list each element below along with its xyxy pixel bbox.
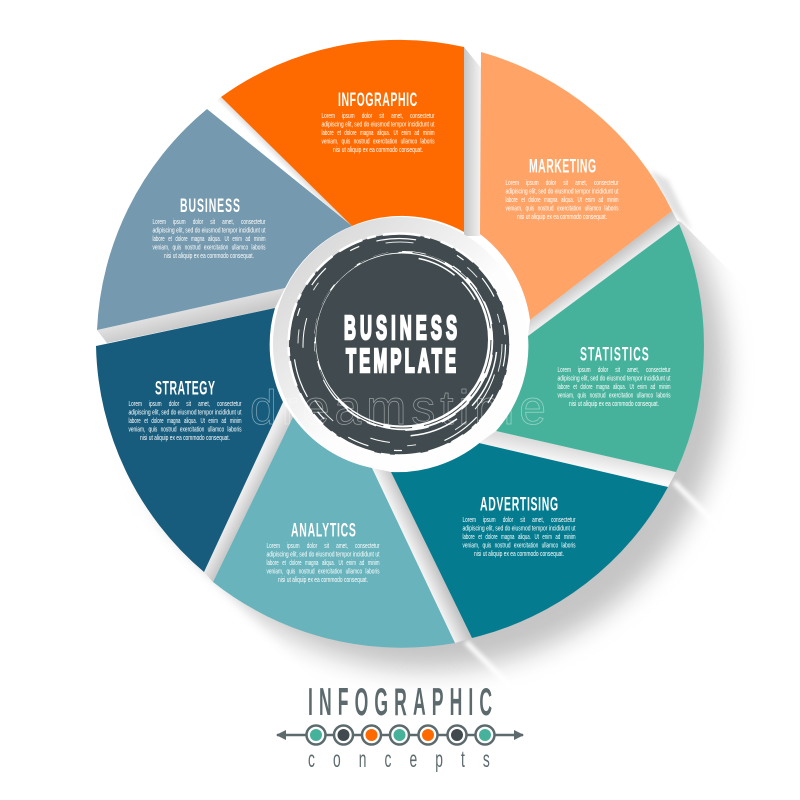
footer title: INFOGRAPHIC [308, 681, 492, 724]
text block: advertising: labore et dolore magna aliqua. Ut enim ad minim [462, 532, 576, 541]
text block: infographic: nisi ut aliquip ex ea commodo consequat. [333, 145, 423, 154]
center hub ring [273, 217, 527, 471]
footer subtitle: concepts [308, 748, 490, 773]
text block: analytics [266, 541, 380, 584]
text block: statistics: nisi ut aliquip ex ea commodo consequat. [569, 399, 659, 408]
text block: marketing: veniam, quis nostrud exercitation ullamco laboris [506, 204, 619, 212]
text block: business: adipiscing elit, sed do eiusmod tempor incididunt ut [152, 226, 266, 234]
heading: strategy: STRATEGY [155, 378, 215, 399]
text block: analytics: Lorem ipsum dolor sit amet, consectetur [266, 541, 380, 550]
panel: business [97, 109, 352, 330]
text block: infographic [322, 111, 435, 154]
shadow cut lower left [0, 400, 335, 800]
heading: marketing: MARKETING [529, 156, 596, 177]
panel: infographic [221, 40, 464, 232]
text block: marketing [506, 178, 619, 221]
drop shadow [130, 74, 726, 670]
text block: business: nisi ut aliquip ex ea commodo consequat. [164, 251, 254, 260]
text block: strategy: adipiscing elit, sed do eiusmod tempor incididunt ut [128, 408, 242, 416]
text block: analytics: veniam, quis nostrud exercitation ullamco laboris [266, 566, 380, 576]
panel: analytics [213, 417, 455, 648]
shadow streak right [674, 482, 745, 553]
text block: statistics: Lorem ipsum dolor sit amet, consectetur [558, 365, 671, 374]
text block: advertising: adipiscing elit, sed do eiusmod tempor incididunt ut [462, 524, 576, 532]
text block: business: Lorem ipsum dolor sit amet, consectetur [152, 217, 266, 226]
heading: infographic: INFOGRAPHIC [338, 90, 417, 111]
center badge [288, 234, 510, 456]
heading: analytics: ANALYTICS [291, 520, 356, 541]
text block: analytics: adipiscing elit, sed do eiusmod tempor incididunt ut [266, 550, 380, 558]
text block: infographic: labore et dolore magna aliqua. Ut enim ad minim [322, 128, 434, 137]
text block: business: labore et dolore magna aliqua. Ut enim ad minim [152, 234, 266, 243]
text block: marketing: adipiscing elit, sed do eiusmod tempor incididunt ut [506, 186, 618, 196]
heading: business: BUSINESS [180, 196, 240, 217]
text block: statistics [558, 365, 671, 408]
text block: infographic: veniam, quis nostrud exercitation ullamco laboris [322, 136, 435, 146]
text block: strategy: Lorem ipsum dolor sit amet, consectetur [128, 399, 242, 408]
text block: marketing: Lorem ipsum dolor sit amet, consectetur [506, 178, 619, 187]
panel: statistics [496, 224, 704, 472]
text block: strategy [128, 399, 242, 442]
text block: infographic: Lorem ipsum dolor sit amet, consectetur [322, 111, 435, 120]
text block: business: veniam, quis nostrud exercitation ullamco laboris [152, 242, 266, 252]
panel: marketing [480, 52, 672, 320]
text block: analytics: nisi ut aliquip ex ea commodo consequat. [278, 575, 368, 584]
text block: statistics: veniam, quis nostrud exercitation ullamco laboris [558, 390, 671, 400]
brush ring [309, 248, 497, 436]
gap shadows [97, 47, 679, 643]
text block: statistics: labore et dolore magna aliqua. Ut enim ad minim [558, 382, 670, 391]
base disc [100, 44, 700, 644]
text block: strategy: labore et dolore magna aliqua. Ut enim ad minim [128, 416, 242, 425]
panel: strategy [96, 308, 283, 572]
text block: infographic: adipiscing elit, sed do eiusmod tempor incididunt ut [322, 120, 434, 128]
text block: advertising [462, 515, 576, 558]
text block: advertising: nisi ut aliquip ex ea commodo consequat. [474, 549, 564, 558]
text block: marketing: nisi ut aliquip ex ea commodo consequat. [517, 212, 607, 221]
marketing edge shadow [650, 170, 692, 230]
title: business template [344, 309, 457, 380]
title: business template: TEMPLATE [346, 342, 456, 380]
text block: strategy: veniam, quis nostrud exercitation ullamco laboris [128, 424, 242, 434]
text block: business [152, 217, 266, 260]
shadow cut upper right [300, 0, 800, 341]
footer timeline icon [276, 726, 524, 744]
heading: advertising: ADVERTISING [480, 494, 558, 515]
text block: advertising: Lorem ipsum dolor sit amet, consectetur [462, 515, 576, 524]
text block: advertising: veniam, quis nostrud exercitation ullamco laboris [462, 540, 576, 550]
watermark: dreamstime [250, 382, 546, 435]
text block: strategy: nisi ut aliquip ex ea commodo consequat. [140, 433, 230, 442]
text block: statistics: adipiscing elit, sed do eiusmod tempor incididunt ut [558, 374, 670, 382]
heading: statistics: STATISTICS [580, 344, 649, 365]
text block: marketing: labore et dolore magna aliqua. Ut enim ad minim [506, 195, 618, 204]
brush rim [288, 234, 510, 456]
title: business template: BUSINESS [344, 309, 457, 347]
shadow streak bottom [466, 642, 535, 711]
text block: analytics: labore et dolore magna aliqua. Ut enim ad minim [266, 558, 380, 567]
panel: advertising [391, 443, 668, 638]
